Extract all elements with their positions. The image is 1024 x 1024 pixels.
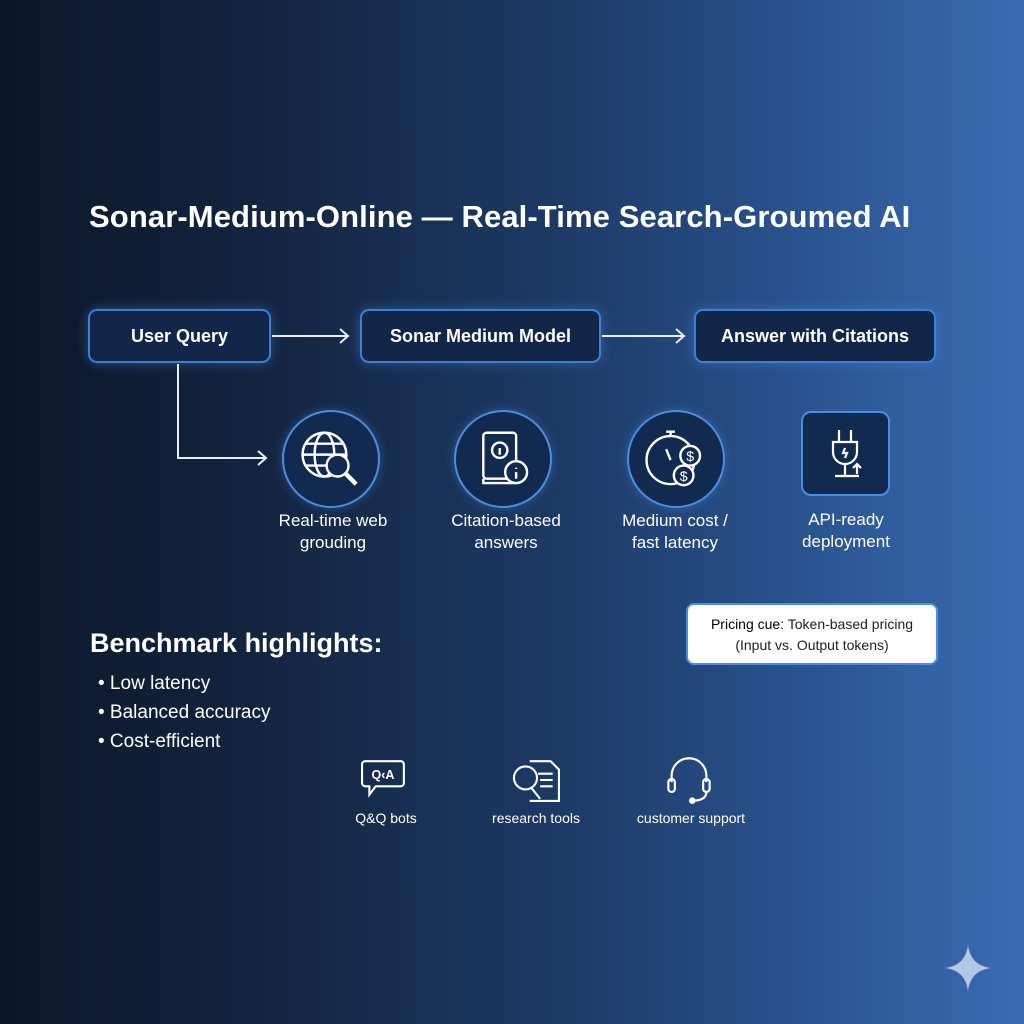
callout: pricing cue: (Input vs. Output tokens)	[735, 637, 889, 653]
icon: Q&A	[361, 760, 405, 798]
icon: Q&A: Q‹A	[371, 768, 394, 782]
bullet list: • Cost-efficient	[98, 731, 220, 752]
text: research tools	[492, 810, 580, 826]
icon: globe search	[282, 410, 380, 508]
text: Citation-based	[451, 511, 561, 530]
bullet list	[98, 673, 270, 752]
icon: stopwatch cost: $	[686, 449, 694, 465]
title: Sonar-Medium-Online — Real-Time Search-Groumed AI	[89, 199, 910, 234]
bullet list: • Balanced accuracy	[98, 702, 270, 723]
text: answers	[474, 533, 538, 552]
text: fast latency	[632, 533, 718, 552]
text: deployment	[802, 532, 890, 551]
icon: API plug	[801, 411, 890, 496]
feature labels: grouding	[300, 533, 366, 552]
feature labels: Real-time web	[279, 511, 387, 530]
icon: stopwatch cost: $	[680, 469, 688, 485]
bullet list: • Low latency	[98, 673, 210, 694]
callout: pricing cue	[686, 603, 938, 665]
box: user query	[88, 309, 271, 363]
box: sonar medium model: Sonar Medium Model	[390, 326, 571, 346]
text: API-ready	[808, 510, 884, 529]
icon: sparkle	[945, 945, 990, 991]
callout: pricing cue: Pricing cue: Token-based pricing	[711, 616, 913, 632]
icon: headset	[667, 757, 711, 804]
use-case labels: Q&Q bots	[355, 810, 417, 826]
icon: research	[512, 760, 560, 802]
box: answer with citations	[694, 309, 936, 363]
box: user query: User Query	[131, 326, 228, 346]
heading: benchmark highlights: Benchmark highlights:	[90, 628, 383, 658]
feature labels	[279, 511, 387, 552]
text: customer support	[637, 810, 745, 826]
icon: stopwatch cost	[627, 410, 725, 508]
icon: citation book	[454, 410, 552, 508]
box: answer with citations: Answer with Citations	[721, 326, 909, 346]
box: sonar medium model	[360, 309, 601, 363]
text: Medium cost /	[622, 511, 728, 530]
